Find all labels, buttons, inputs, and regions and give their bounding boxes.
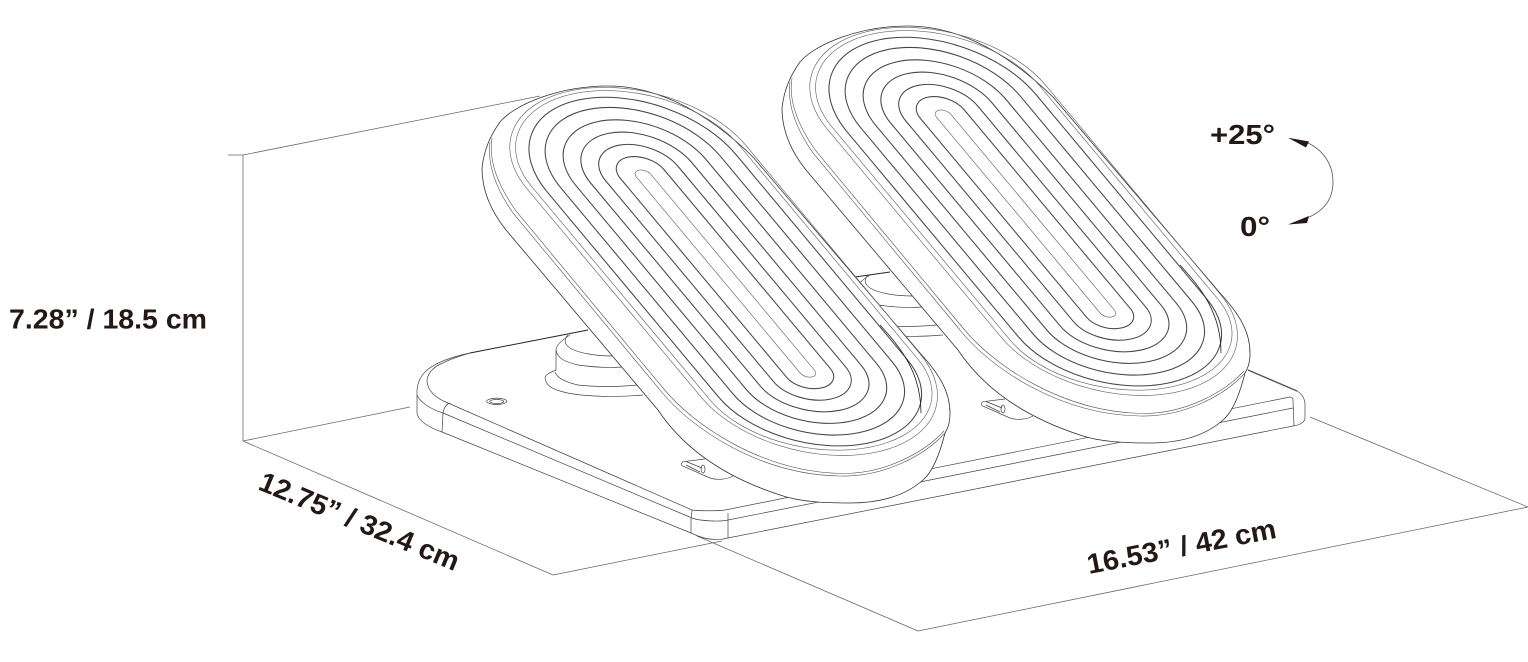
label: width: 16.53” / 42 cm (1084, 513, 1279, 580)
slot left (682, 459, 733, 479)
label: height: 7.28” / 18.5 cm (9, 304, 207, 334)
foot pivot left (545, 335, 643, 396)
pedal outline (782, 26, 1250, 443)
pedal bevel edge (489, 138, 945, 476)
pedal left (463, 69, 984, 503)
label: min angle: 0° (1240, 211, 1270, 242)
foot pivot right (845, 275, 943, 336)
label: depth: 12.75” / 32.4 cm (255, 466, 464, 577)
groove shadow (880, 325, 921, 413)
rotation arrow (1288, 138, 1333, 224)
pedal bevel edge (789, 78, 1245, 416)
back edge (470, 272, 890, 353)
dimension lines (228, 96, 1528, 631)
groove shadow (1180, 265, 1221, 353)
slot right (982, 399, 1033, 419)
concentric grooves (463, 69, 984, 474)
concentric grooves (763, 9, 1284, 414)
back right edge (1248, 370, 1297, 391)
pedal outline (482, 86, 950, 503)
base plate (417, 272, 1305, 540)
pedal right (763, 9, 1284, 443)
screw hole (487, 398, 507, 404)
label: max angle: +25° (1210, 119, 1275, 150)
